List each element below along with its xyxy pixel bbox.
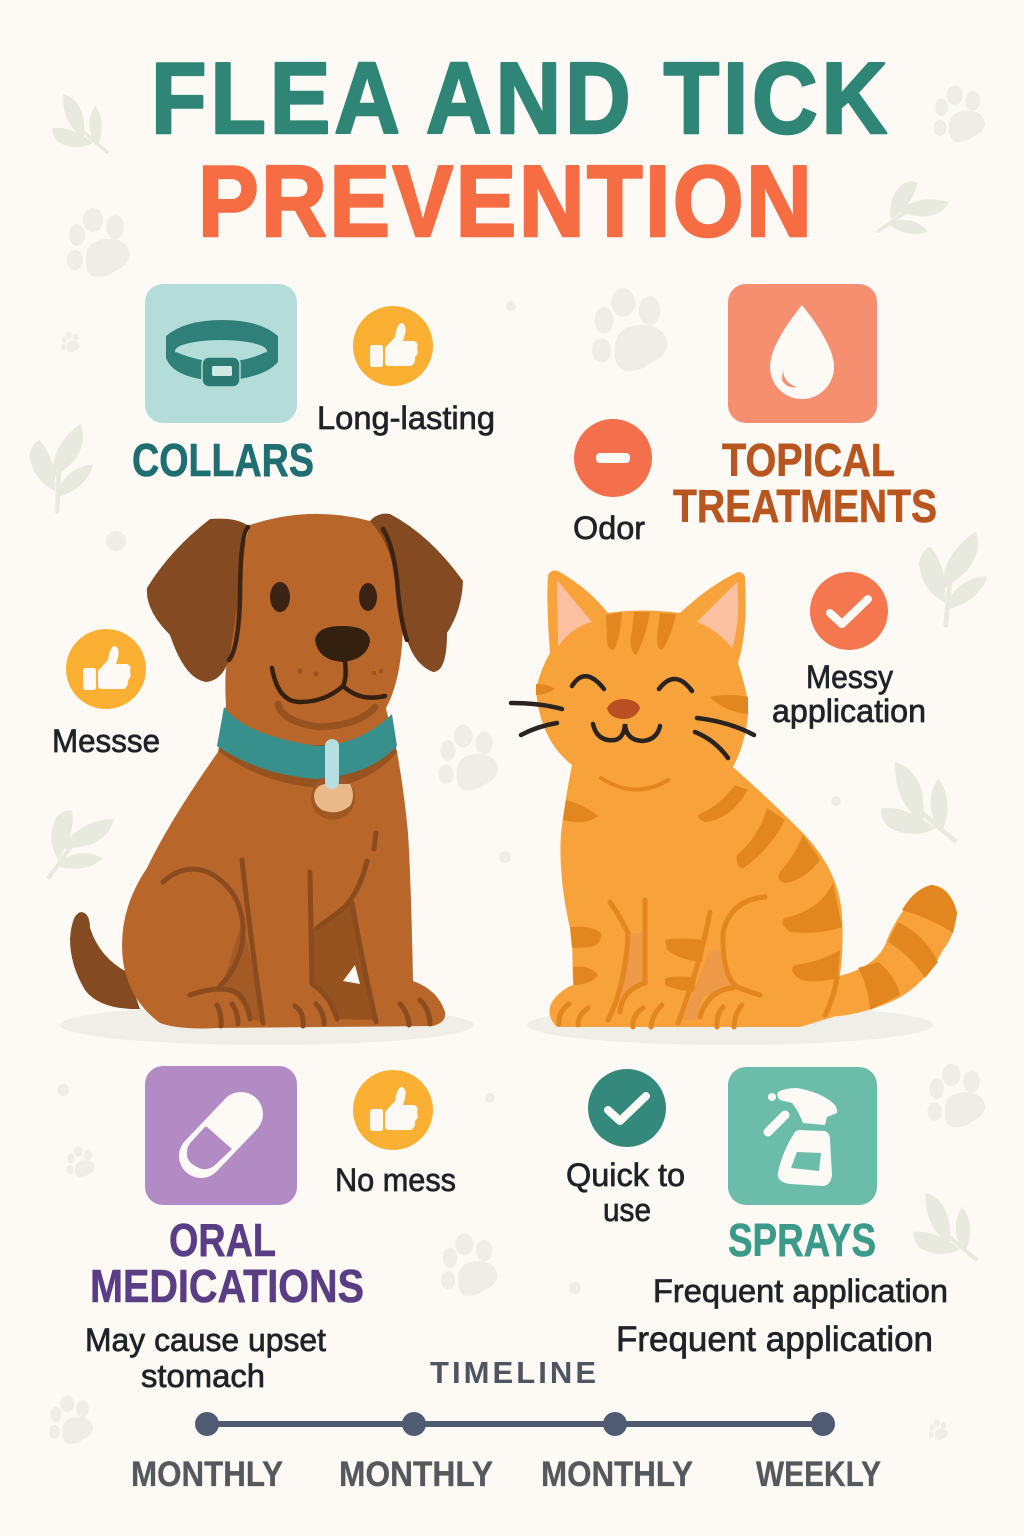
heading: topical treatments xyxy=(673,434,937,532)
icon: check xyxy=(810,572,888,650)
panel: collars xyxy=(132,284,495,486)
icon: thumbs up xyxy=(353,1070,433,1150)
note: frequent application large: Frequent application xyxy=(616,1320,933,1359)
note: frequent application: Frequent application xyxy=(653,1273,948,1309)
icon: thumbs up xyxy=(353,306,433,386)
note: messy application xyxy=(772,659,926,729)
heading: collars: COLLARS xyxy=(132,434,314,486)
benefit: quick to use: use xyxy=(603,1192,651,1228)
heading: sprays: SPRAYS xyxy=(728,1214,876,1266)
title xyxy=(151,43,887,258)
icon: thumbs up left xyxy=(66,629,146,709)
panel: sprays xyxy=(566,1067,948,1359)
timeline track xyxy=(195,1412,835,1436)
drawback: odor: Odor xyxy=(573,510,645,546)
icon: check xyxy=(588,1069,666,1147)
icon: capsule xyxy=(145,1066,297,1205)
heading: oral medications: MEDICATIONS xyxy=(90,1260,364,1312)
icon: minus xyxy=(574,419,652,497)
timeline labels: MONTHLY xyxy=(131,1455,283,1494)
timeline xyxy=(131,1355,881,1494)
timeline labels: MONTHLY xyxy=(541,1455,693,1494)
benefit: quick to use xyxy=(566,1157,685,1228)
illustration: cat xyxy=(511,571,957,1045)
panel: oral medications xyxy=(85,1066,456,1394)
note: may cause upset stomach xyxy=(85,1322,326,1394)
cat tail xyxy=(825,885,957,1017)
note: messy application: application xyxy=(772,693,926,729)
timeline heading: TIMELINE xyxy=(430,1355,596,1390)
title: PREVENTION xyxy=(198,146,812,258)
heading: oral medications: ORAL xyxy=(169,1214,276,1266)
icon: collar xyxy=(145,284,297,423)
note: may cause upset stomach: stomach xyxy=(141,1358,265,1394)
panel: topical treatments xyxy=(573,284,937,729)
illustration: dog xyxy=(60,514,474,1045)
dog collar xyxy=(217,707,397,820)
benefit: no mess: No mess xyxy=(335,1162,456,1198)
heading: oral medications xyxy=(90,1214,364,1312)
label: messse: Messse xyxy=(52,723,160,759)
benefit: quick to use: Quick to xyxy=(566,1157,685,1193)
benefit: long-lasting: Long-lasting xyxy=(317,400,495,436)
icon: spray bottle xyxy=(728,1067,877,1205)
title: FLEA AND TICK xyxy=(151,43,887,155)
heading: topical treatments: TOPICAL xyxy=(722,434,895,486)
heading: topical treatments: TREATMENTS xyxy=(673,480,937,532)
note: may cause upset stomach: May cause upset xyxy=(85,1322,326,1358)
timeline labels: MONTHLY xyxy=(339,1455,493,1494)
timeline labels: WEEKLY xyxy=(756,1455,881,1494)
icon: droplet xyxy=(728,284,877,423)
callout: messse xyxy=(52,629,160,759)
note: messy application: Messy xyxy=(806,659,893,695)
timeline labels xyxy=(131,1455,881,1494)
